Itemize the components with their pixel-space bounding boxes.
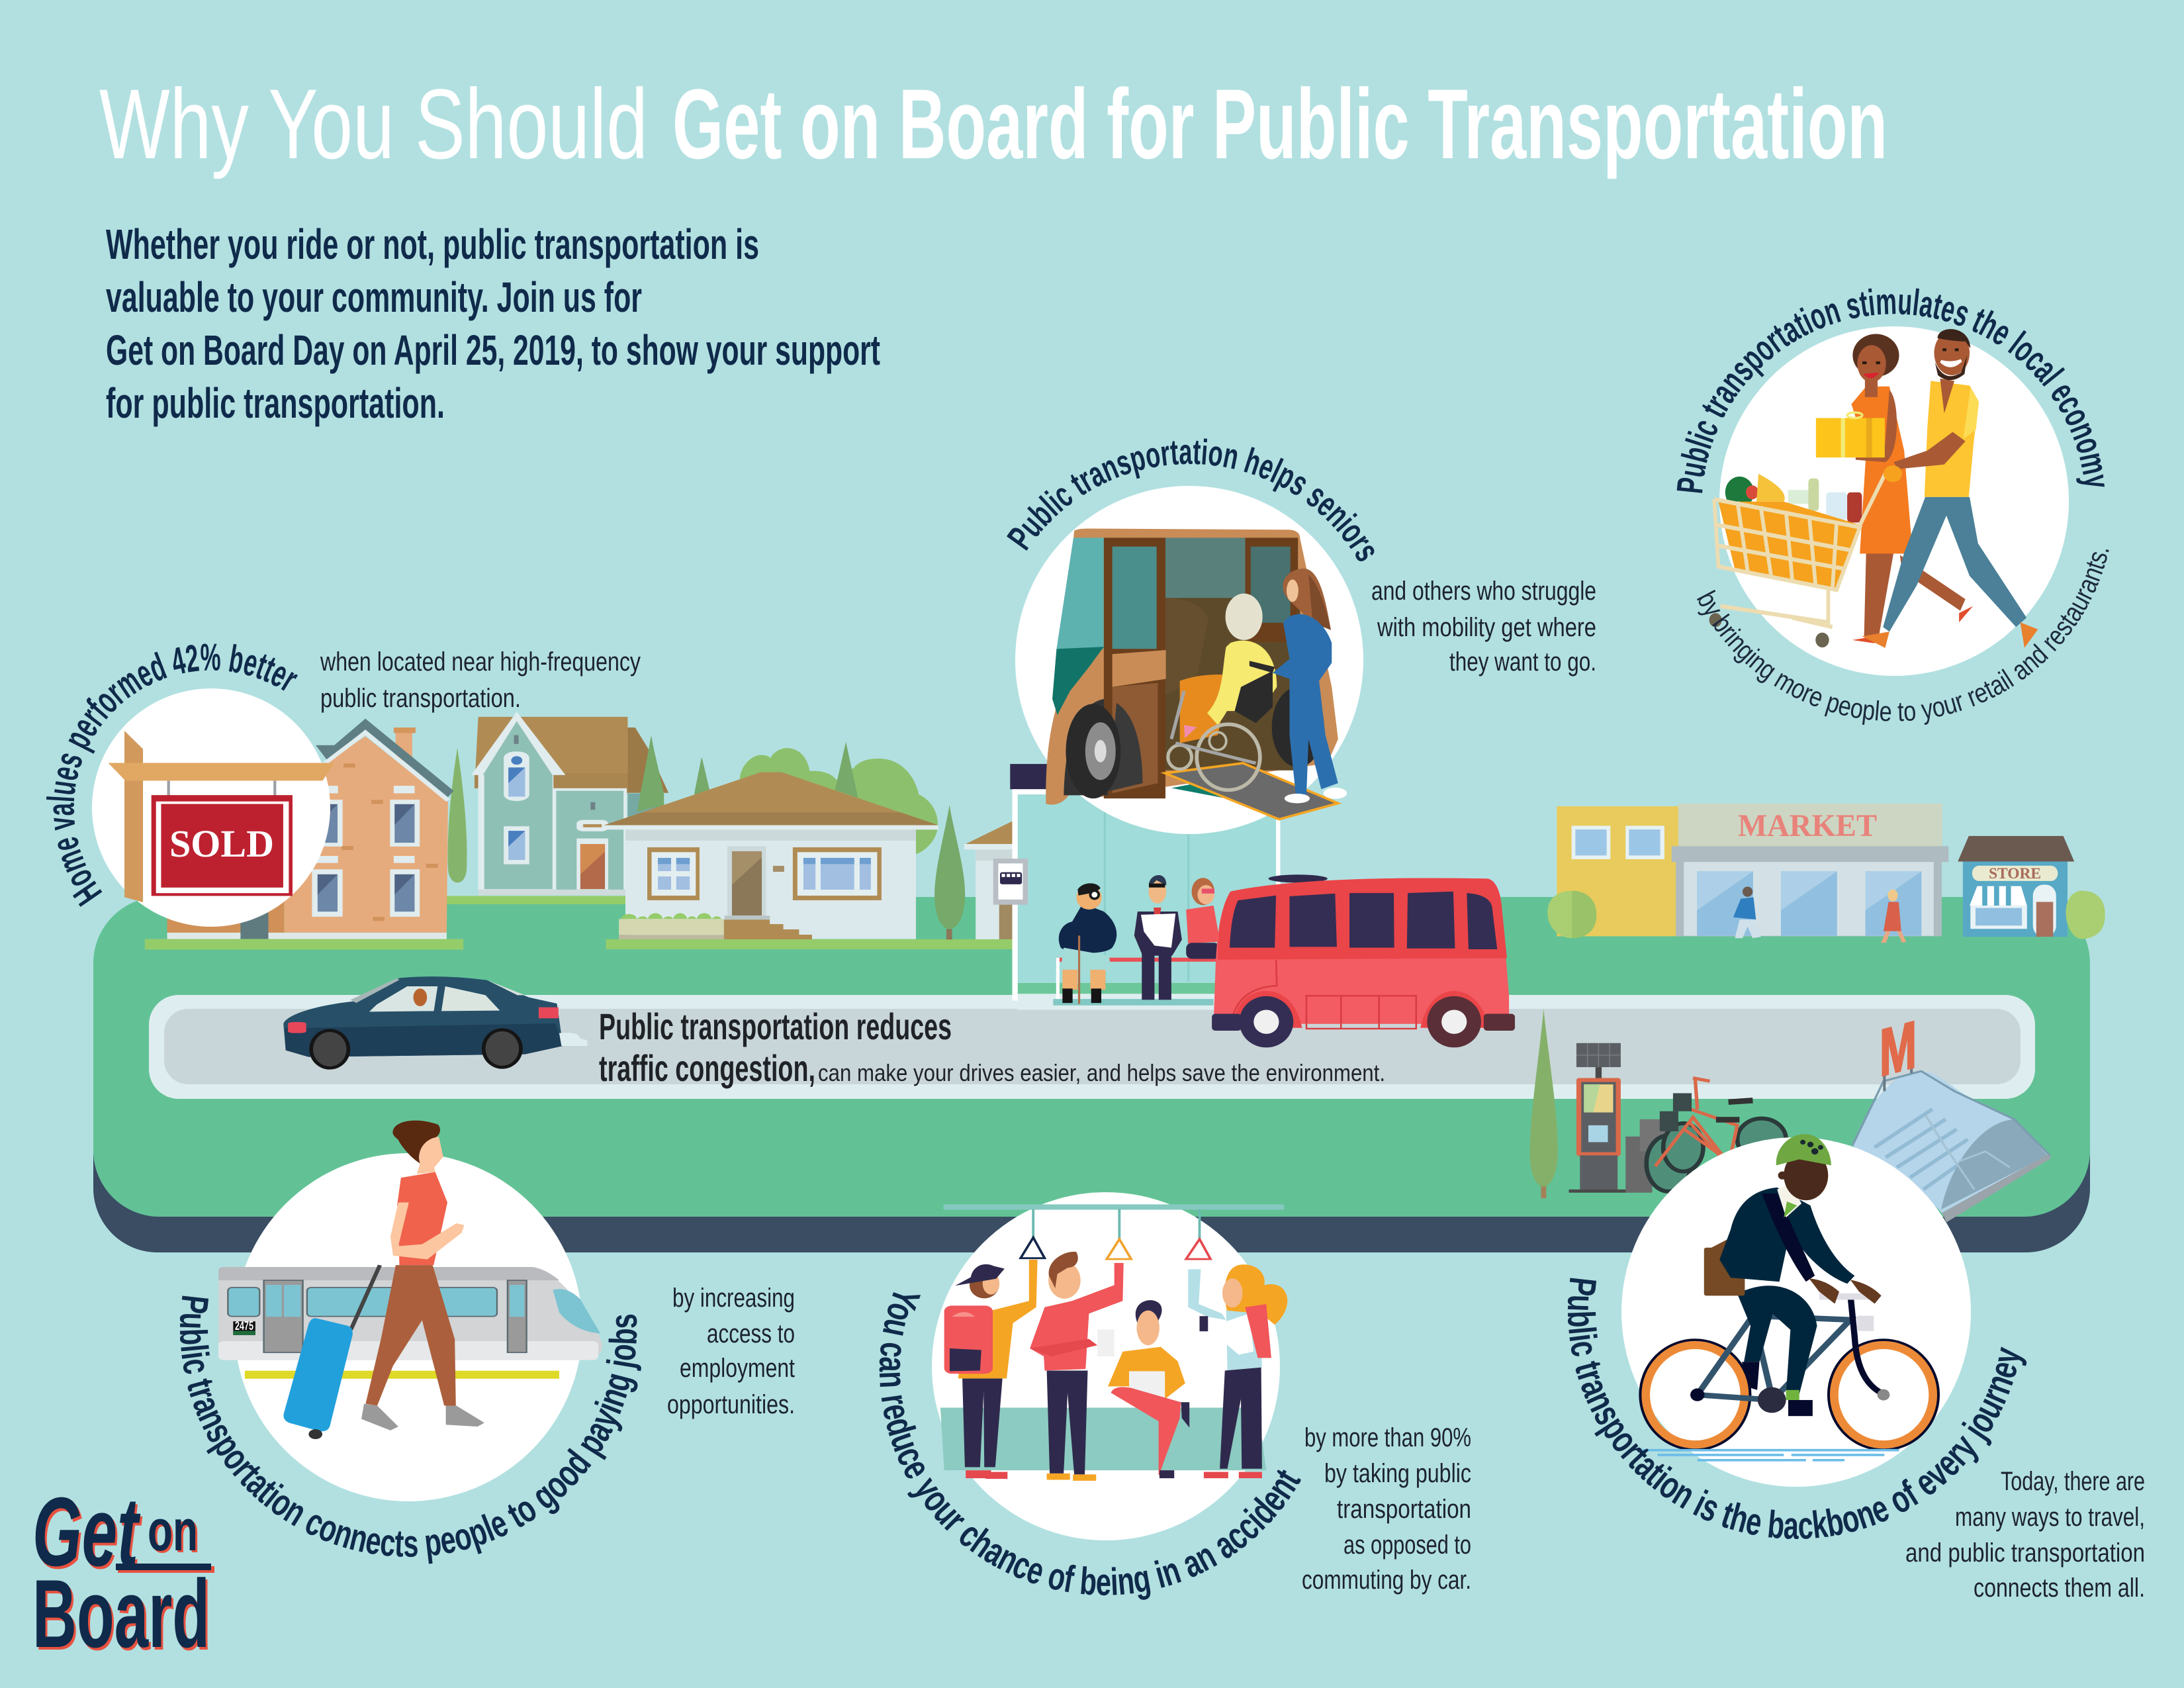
rider with phone <box>1188 1264 1287 1478</box>
gift box <box>1816 412 1885 457</box>
panel: jobs circle <box>180 1120 795 1564</box>
intro text: Whether you ride or not, public transportation is <box>106 220 759 268</box>
rider in red <box>1030 1252 1124 1481</box>
logo: Get on Board <box>32 1477 214 1670</box>
wheels <box>1640 1340 1938 1450</box>
logo shadow: on <box>150 1499 200 1565</box>
ground platform <box>93 897 2090 1252</box>
cypress tree <box>448 748 467 882</box>
body text: when located near high-frequency <box>320 647 641 677</box>
market buildings <box>1547 804 2105 943</box>
cypress <box>1541 1186 1546 1198</box>
shelter <box>1010 764 1281 1009</box>
SOLD sign <box>108 731 334 902</box>
body text: commuting by car. <box>1302 1566 1471 1595</box>
door <box>1104 538 1165 798</box>
door <box>727 846 766 915</box>
bus door panels <box>1230 960 1416 1029</box>
wheel arches <box>1232 991 1302 1028</box>
curved heading: Public transportation is the backbone of every journey <box>1567 1278 2026 1539</box>
body text: opportunities. <box>667 1390 795 1419</box>
body text: with mobility get where <box>1377 613 1596 642</box>
body text: by increasing <box>672 1284 795 1313</box>
torso and arm <box>1719 1188 1854 1284</box>
bush right <box>2066 891 2105 939</box>
SOLD sign: SOLD <box>169 822 274 865</box>
head and helmet <box>1784 1150 1828 1200</box>
curved body text: by bringing more people to your retail and restaurants. <box>1697 549 2109 726</box>
wheelchair and passenger <box>1180 675 1230 743</box>
illustration: riders on a train <box>940 1204 1287 1481</box>
curved heading: Public transportation helps seniors <box>1007 438 1374 561</box>
illustration: accessible van <box>1046 528 1347 820</box>
road text: Public transportation reduces <box>599 1006 952 1047</box>
panel: home values circle <box>46 643 641 927</box>
illustration: cyclist <box>1640 1134 1938 1460</box>
man <box>1862 329 2038 648</box>
grass <box>606 939 1013 949</box>
rail and seat <box>943 1204 1284 1209</box>
bus stop sign <box>993 859 1028 905</box>
logo wordmark: Get <box>32 1477 141 1587</box>
businessman <box>1134 875 1182 1000</box>
curved heading: Public transportation connects people to good paying jobs <box>180 1296 641 1564</box>
illustration: shopping couple <box>1709 329 2038 648</box>
body text: and others who struggle <box>1371 577 1596 606</box>
rider with backpack <box>944 1260 1038 1479</box>
messenger bag <box>1704 1248 1745 1295</box>
intro text: for public transportation. <box>106 379 445 427</box>
traveller <box>361 1121 484 1430</box>
curved heading: You can reduce your chance of being in an accident <box>879 1292 1301 1600</box>
body text: employment <box>680 1354 795 1383</box>
woman <box>1851 334 1973 643</box>
right window <box>793 847 882 900</box>
wheels <box>1240 996 1293 1047</box>
logo wordmark <box>32 1477 211 1667</box>
intro text: valuable to your community. Join us for <box>106 273 642 321</box>
rider legs <box>1737 1286 1817 1394</box>
bench <box>1056 958 1218 962</box>
transit hub: kiosk, bikes, metro entrance <box>1530 1009 2051 1223</box>
illustration: train and traveller <box>218 1121 602 1439</box>
body text <box>1371 577 1596 677</box>
logo shadow <box>34 1480 214 1670</box>
logo wordmark: Board <box>32 1560 210 1667</box>
gloves <box>1809 1278 1839 1304</box>
metro canopy <box>1852 1071 2050 1217</box>
body text: as opposed to <box>1343 1530 1471 1560</box>
body text: by taking public <box>1324 1459 1471 1488</box>
green house <box>471 712 710 895</box>
bus shelter with commuters <box>993 764 1281 1009</box>
panel: seniors circle <box>1007 438 1596 834</box>
bus windows <box>1230 892 1497 949</box>
car <box>283 976 587 1070</box>
body text: they want to go. <box>1449 647 1596 677</box>
curved heading: Home values performed 42% better <box>46 643 298 907</box>
shopper blue <box>1733 886 1761 938</box>
cypress <box>946 929 952 939</box>
steps <box>725 915 770 919</box>
body text: by more than 90% <box>1304 1423 1471 1452</box>
suitcase <box>283 1265 380 1439</box>
bush left <box>1547 891 1596 938</box>
body text <box>667 1284 795 1419</box>
frame <box>1698 1316 1850 1400</box>
train number: 2475 <box>235 1319 253 1333</box>
shopper red <box>1881 890 1906 943</box>
bumpers <box>1212 1014 1242 1031</box>
brick house <box>145 719 463 950</box>
yellow building <box>1557 806 1678 936</box>
market signage <box>1738 808 2041 882</box>
bike docks <box>1625 1137 1652 1193</box>
store <box>1958 836 2074 861</box>
white house with trees <box>604 736 1013 949</box>
panel: local economy circle <box>1677 289 2109 726</box>
old man <box>1059 883 1116 1004</box>
market <box>1678 804 1942 847</box>
bikes <box>1647 1119 1786 1192</box>
logo shadow: Board <box>34 1562 212 1670</box>
panel: accident circle <box>879 1192 1471 1600</box>
seated rider <box>1108 1300 1189 1478</box>
ground lines <box>1642 1450 1899 1460</box>
ramp <box>1171 783 1230 799</box>
caregiver <box>1283 569 1331 630</box>
market signage: STORE <box>1989 865 2041 882</box>
road text: traffic congestion, <box>599 1047 815 1089</box>
train <box>218 1267 602 1379</box>
body text: access to <box>707 1319 795 1348</box>
body text <box>1905 1467 2145 1603</box>
red bus <box>1212 874 1515 1047</box>
body text <box>1302 1423 1471 1595</box>
planter <box>621 914 721 919</box>
neighbour house <box>966 821 1013 844</box>
body text: public transportation. <box>320 684 521 713</box>
road <box>149 995 2035 1099</box>
ticket kiosk <box>1569 1043 1627 1193</box>
body text: connects them all. <box>1974 1573 2145 1603</box>
intro text: Get on Board Day on April 25, 2019, to show your support <box>106 326 880 374</box>
logo wordmark: on <box>148 1497 198 1563</box>
road text <box>599 1006 1385 1089</box>
wheel <box>1064 699 1108 795</box>
logo shadow: Get <box>34 1480 143 1589</box>
left window <box>647 847 700 900</box>
houses: brick and green <box>145 712 710 950</box>
grass strip <box>447 896 627 904</box>
title: Why You Should <box>99 68 648 179</box>
curved heading: Public transportation stimulates the local economy <box>1677 289 2105 493</box>
hip roof <box>604 773 938 825</box>
panel: backbone circle <box>1567 1134 2145 1603</box>
title <box>99 68 1888 179</box>
bushes behind house <box>668 748 938 855</box>
body text <box>320 647 641 713</box>
shopping cart and groceries <box>1709 465 1902 647</box>
metro sign: M <box>1880 1007 1917 1091</box>
body text: transportation <box>1337 1495 1471 1524</box>
straps <box>1021 1209 1210 1259</box>
market signage: MARKET <box>1738 808 1877 843</box>
intro text <box>106 220 880 427</box>
woman reading <box>1186 878 1220 959</box>
road text: can make your drives easier, and helps save the environment. <box>818 1059 1385 1086</box>
